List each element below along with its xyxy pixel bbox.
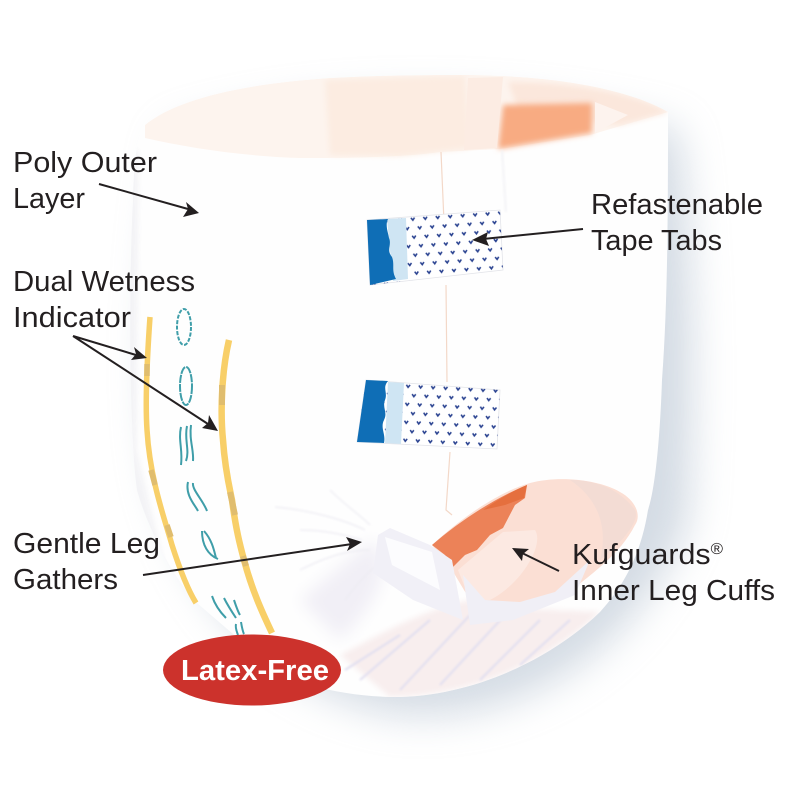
label: Refastenable Tape Tabs: Refastenable bbox=[591, 189, 763, 221]
teal wetness numerals bbox=[177, 309, 244, 635]
badge: Latex-Free bbox=[163, 634, 341, 706]
inner rim lining bbox=[145, 75, 668, 158]
label: Kufguards Inner Leg Cuffs: ® bbox=[711, 541, 723, 558]
label: Dual Wetness Indicator bbox=[13, 266, 195, 334]
badge: Latex-Free: Latex-Free bbox=[181, 655, 329, 687]
arrow: Refastenable Tape Tabs bbox=[472, 229, 583, 246]
wetness indicator stripe: right bbox=[222, 340, 272, 633]
arrows: Dual Wetness Indicator bbox=[73, 336, 218, 431]
soft drop shadow bbox=[150, 99, 693, 716]
label: Gentle Leg Gathers: Gentle Leg bbox=[13, 528, 160, 560]
leg gathers creases bbox=[275, 490, 378, 600]
diaper body bbox=[124, 75, 668, 697]
white leg gather frill bbox=[373, 528, 463, 620]
label: Dual Wetness Indicator: Dual Wetness bbox=[13, 266, 195, 298]
label: Refastenable Tape Tabs bbox=[591, 189, 763, 257]
label: Poly Outer Layer: Layer bbox=[13, 183, 85, 215]
tape tab: top bbox=[367, 210, 503, 285]
left-edge shading bbox=[130, 162, 154, 534]
label: Refastenable Tape Tabs: Tape Tabs bbox=[591, 225, 722, 257]
label: Kufguards Inner Leg Cuffs: Inner Leg Cuffs bbox=[572, 575, 775, 607]
label: Poly Outer Layer: Poly Outer bbox=[13, 147, 157, 179]
leg opening: Kufguards inner cuff bbox=[373, 479, 638, 625]
label: Dual Wetness Indicator: Indicator bbox=[13, 302, 131, 334]
tape tab: bottom bbox=[357, 380, 500, 449]
label: Poly Outer Layer bbox=[13, 147, 157, 215]
arrow: Poly Outer Layer bbox=[99, 184, 199, 217]
label: Gentle Leg Gathers: Gathers bbox=[13, 564, 118, 596]
label: Kufguards Inner Leg Cuffs bbox=[572, 539, 775, 607]
arrow: Kufguards Inner Leg Cuffs bbox=[512, 548, 559, 571]
wetness indicator stripe: left bbox=[146, 317, 196, 603]
front fold and centre seam bbox=[440, 152, 452, 516]
arrow: Gentle Leg Gathers bbox=[143, 537, 362, 575]
label: Gentle Leg Gathers bbox=[13, 528, 160, 596]
bottom ruffled panel bbox=[300, 540, 600, 697]
infographic: annotated diaper bbox=[14, 75, 774, 732]
label: Kufguards Inner Leg Cuffs: Kufguards bbox=[572, 539, 704, 571]
orange absorbent core bbox=[464, 77, 628, 150]
